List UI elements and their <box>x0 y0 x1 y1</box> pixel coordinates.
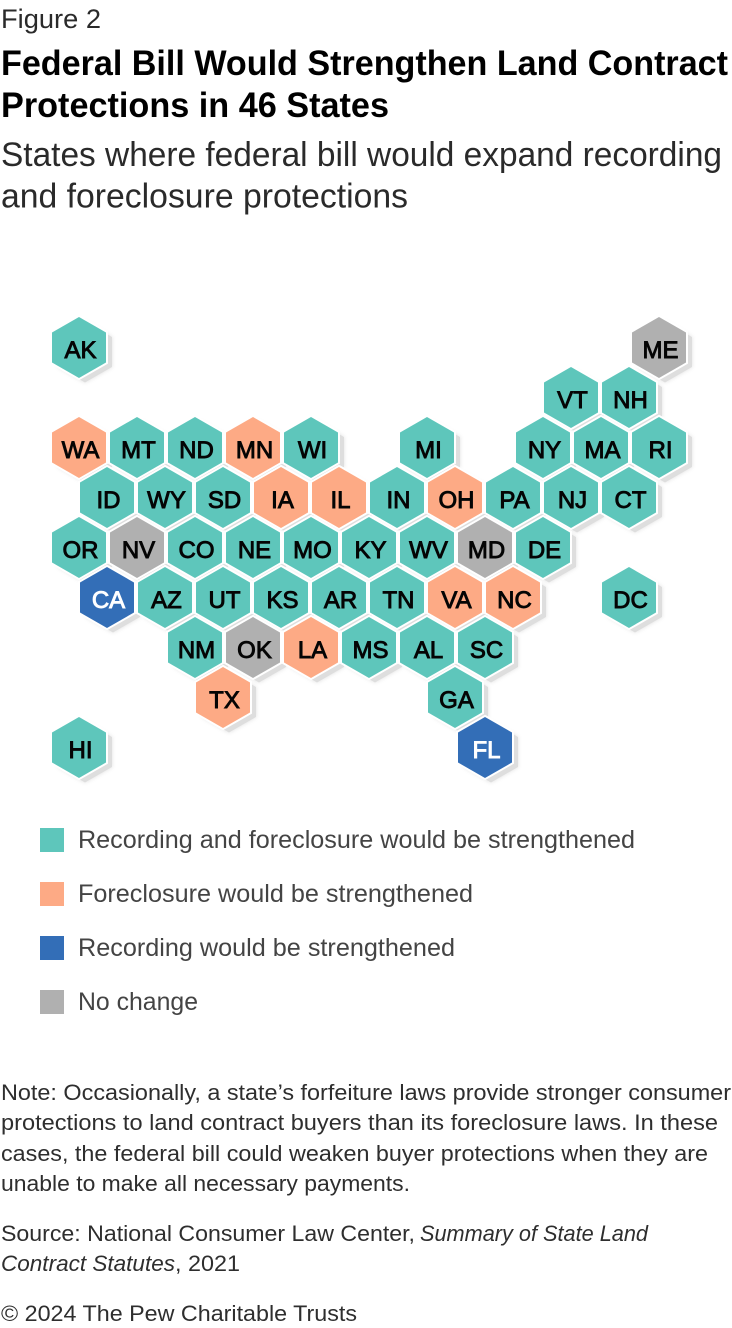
hexagon tile map of states: NM <box>178 637 215 664</box>
hexagon tile map of states: DC <box>613 587 648 614</box>
source <box>1 1221 649 1276</box>
title: Protections in 46 States <box>1 86 389 125</box>
hexagon tile map of states: WY <box>147 487 186 514</box>
hexagon tile map of states: MS <box>352 637 388 664</box>
title: Federal Bill Would Strengthen Land Contract <box>1 44 728 83</box>
hexagon tile map of states: NV <box>122 537 155 564</box>
hexagon tile map of states: SC <box>470 637 503 664</box>
hexagon tile map of states: IN <box>386 487 410 514</box>
note: unable to make all necessary payments. <box>1 1171 410 1196</box>
hexagon tile map of states: SD <box>208 487 241 514</box>
hexagon tile map of states: GA <box>439 687 474 714</box>
hexagon tile map of states: MN <box>236 437 273 464</box>
hexagon tile map of states: MT <box>121 437 156 464</box>
copyright: © 2024 The Pew Charitable Trusts <box>1 1301 357 1326</box>
hexagon tile map of states: OK <box>237 637 272 664</box>
hexagon tile map of states: ND <box>179 437 214 464</box>
hexagon tile map of states: NC <box>497 587 532 614</box>
hexagon tile map of states: CO <box>178 537 214 564</box>
hexagon tile map of states: TN <box>382 587 414 614</box>
hexagon tile map of states: NY <box>528 437 561 464</box>
hexagon tile map of states: FL <box>472 737 501 764</box>
hexagon tile map of states: WI <box>298 437 327 464</box>
hexagon tile map of states: OH <box>438 487 474 514</box>
hexagon tile map of states: AZ <box>151 587 182 614</box>
hexagon tile map of states: WA <box>62 437 99 464</box>
subtitle: States where federal bill would expand recording <box>1 136 722 174</box>
hexagon tile map of states: AL <box>414 637 443 664</box>
subtitle <box>1 136 722 216</box>
hexagon tile map of states: VT <box>557 387 588 414</box>
source: Contract Statutes <box>1 1251 175 1276</box>
hexagon tile map of states: MD <box>468 537 505 564</box>
hexagon tile map of states <box>52 317 692 782</box>
note: protections to land contract buyers than its foreclosure laws. In these <box>1 1110 718 1135</box>
source: Summary of State Land <box>420 1221 649 1246</box>
title <box>1 44 728 125</box>
subtitle: and foreclosure protections <box>1 178 408 216</box>
legend item: foreclosure: Foreclosure would be strengthened <box>78 880 473 908</box>
legend item: recording: Recording would be strengthened <box>78 934 455 962</box>
hexagon tile map of states: MO <box>293 537 332 564</box>
hexagon tile map of states: MI <box>415 437 442 464</box>
hexagon tile map of states: ME <box>642 337 678 364</box>
hexagon tile map of states: NJ <box>558 487 587 514</box>
hexagon tile map of states: MA <box>584 437 620 464</box>
hexagon tile map of states: TX <box>209 687 240 714</box>
hexagon tile map of states: NE <box>238 537 271 564</box>
hexagon tile map of states: KY <box>354 537 387 564</box>
legend item: no change: No change <box>78 988 198 1016</box>
hexagon tile map of states: CT <box>614 487 647 514</box>
source: Source: National Consumer Law Center, <box>1 1221 415 1246</box>
hexagon tile map of states: ID <box>96 487 120 514</box>
hexagon tile map of states: DE <box>528 537 561 564</box>
hexagon tile map of states: AK <box>64 337 97 364</box>
hexagon tile map of states: WV <box>409 537 448 564</box>
hexagon tile map of states: OR <box>62 537 98 564</box>
legend item: recording and foreclosure: Recording and foreclosure would be strengthened <box>78 826 635 854</box>
hexagon tile map of states: IL <box>330 487 351 514</box>
hexagon tile map of states: UT <box>208 587 241 614</box>
hexagon tile map of states: KS <box>266 587 299 614</box>
hexagon tile map of states: IA <box>271 487 294 514</box>
hexagon tile map of states: AR <box>324 587 357 614</box>
hexagon tile map of states: LA <box>298 637 327 664</box>
legend <box>40 826 635 1016</box>
note: Note: Occasionally, a state’s forfeiture laws provide stronger consumer <box>1 1080 731 1105</box>
hexagon tile map of states: VA <box>441 587 472 614</box>
hexagon tile map of states: RI <box>648 437 672 464</box>
hexagon tile map of states: HI <box>68 737 92 764</box>
hexagon tile map of states: NH <box>613 387 648 414</box>
hexagon tile map of states: CA <box>92 587 125 614</box>
figure label: Figure 2 <box>1 4 101 34</box>
source: , 2021 <box>175 1251 240 1276</box>
hexagon tile map of states: PA <box>499 487 530 514</box>
note: cases, the federal bill could weaken buyer protections when they are <box>1 1141 708 1166</box>
note <box>1 1080 731 1196</box>
